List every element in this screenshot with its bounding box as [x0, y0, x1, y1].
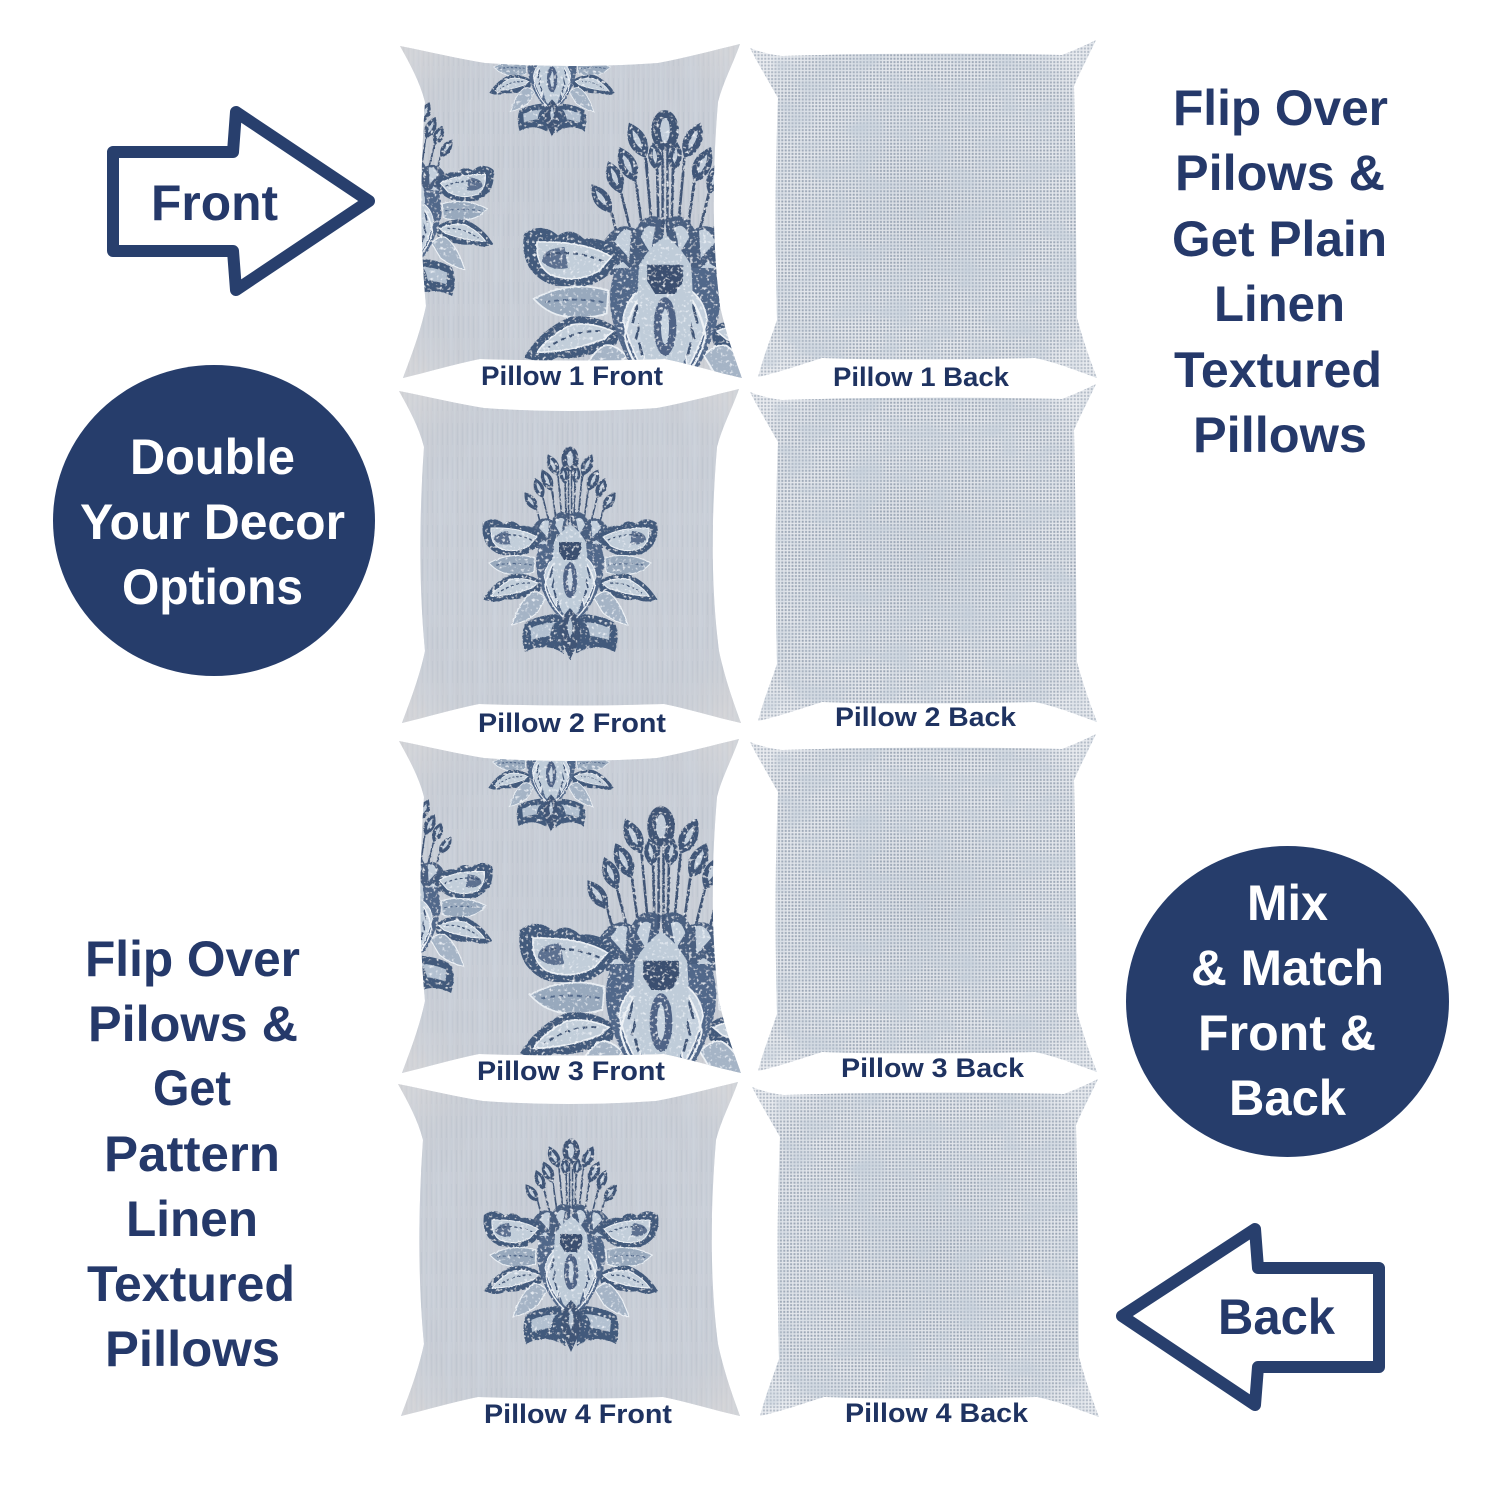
label: Pillow 1 Back	[833, 362, 1010, 392]
text block: flip over pillows pattern linen: Flip Over	[85, 931, 300, 987]
label: Pillow 1 Front	[481, 361, 663, 391]
callout circle: mix and match front and back: Front &	[1198, 1005, 1376, 1061]
text block: flip over pillows pattern linen: Linen	[126, 1191, 258, 1247]
pillow 2 front	[399, 389, 743, 738]
callout circle: double your decor options: Double	[130, 429, 295, 485]
text block: flip over pillows plain linen: Flip Over	[1173, 80, 1388, 136]
text block: flip over pillows pattern linen: Pilows &	[88, 996, 298, 1052]
pillow 2 back	[750, 384, 1098, 732]
text block: flip over pillows plain linen: Textured	[1174, 342, 1382, 398]
callout circle: double your decor options: Your Decor	[80, 494, 345, 550]
pillow 1 front	[400, 44, 742, 386]
arrow label: Back: Back	[1218, 1289, 1335, 1345]
label: Pillow 2 Front	[478, 708, 666, 738]
label: Pillow 3 Front	[477, 1056, 665, 1086]
text block: flip over pillows plain linen	[1172, 80, 1388, 463]
text block: flip over pillows pattern linen	[85, 931, 300, 1377]
text block: flip over pillows pattern linen: Textured	[87, 1256, 295, 1312]
label: Pillow 4 Back	[845, 1398, 1029, 1428]
callout circle: mix and match front and back	[1126, 846, 1449, 1157]
text block: flip over pillows plain linen: Pilows &	[1175, 145, 1385, 201]
text block: flip over pillows pattern linen: Pillows	[105, 1321, 280, 1377]
callout circle: mix and match front and back: Back	[1229, 1070, 1346, 1126]
callout circle: mix and match front and back: & Match	[1191, 940, 1384, 996]
pillow 4 back	[752, 1079, 1100, 1428]
label: Pillow 3 Back	[841, 1053, 1025, 1083]
pillow 1 back	[750, 40, 1098, 392]
label: Pillow 4 Front	[484, 1399, 672, 1429]
label: Pillow 2 Back	[835, 702, 1017, 732]
text block: flip over pillows plain linen: Linen	[1214, 276, 1345, 332]
text block: flip over pillows pattern linen: Pattern	[104, 1126, 280, 1182]
callout circle: double your decor options: Options	[122, 559, 303, 615]
text block: flip over pillows pattern linen: Get	[153, 1060, 231, 1116]
pillow 3 back	[750, 734, 1098, 1083]
text block: flip over pillows plain linen: Pillows	[1193, 407, 1367, 463]
arrow label: Front: Front	[151, 175, 278, 231]
text block: flip over pillows plain linen: Get Plain	[1172, 211, 1387, 267]
arrow: front	[113, 112, 369, 290]
callout circle: double your decor options	[53, 365, 375, 676]
pillow 3 front	[399, 739, 741, 1080]
arrow: back	[1122, 1229, 1379, 1405]
pillow 4 front	[398, 1082, 742, 1429]
callout circle: mix and match front and back: Mix	[1247, 875, 1328, 931]
